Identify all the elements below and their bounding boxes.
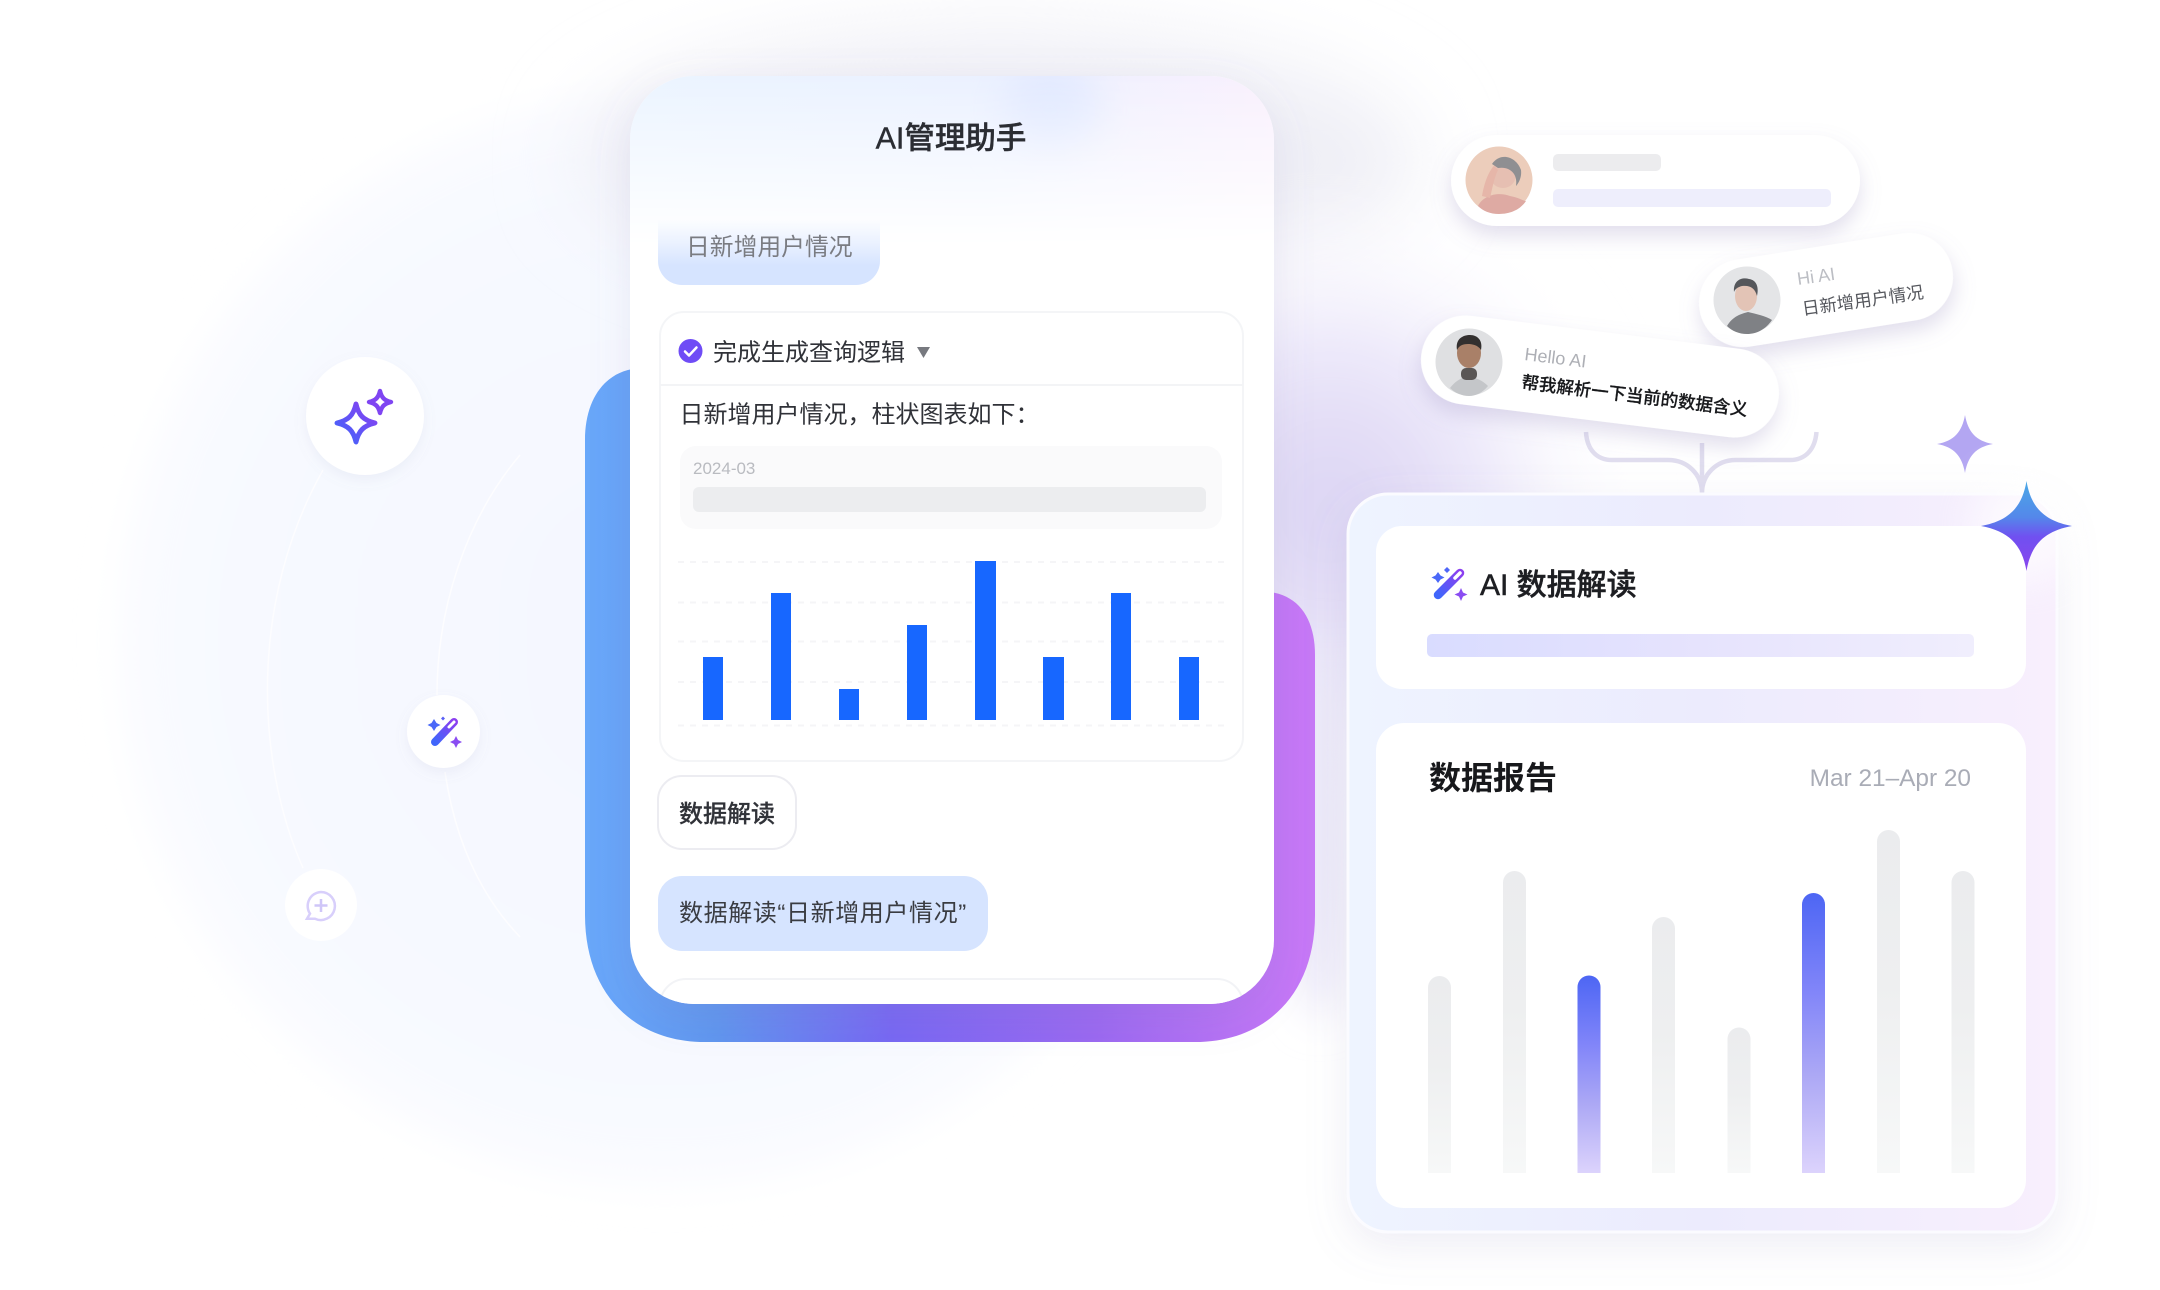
title: AI管理助手: [876, 122, 1026, 156]
icon: magic wand badge: [407, 695, 480, 768]
user query pill: [658, 220, 880, 285]
data interpretation chip: [658, 776, 796, 849]
chat bubble: Hi AI: Hi AI: [1796, 264, 1836, 289]
date selector: [680, 446, 1222, 529]
star: gradient: [1972, 471, 2082, 581]
dropdown arrow: [917, 347, 930, 358]
star: lilac: [1937, 415, 1993, 473]
chat bubble: Hi AI: [1693, 227, 1959, 353]
card: data report: [1376, 723, 2026, 1208]
bar chart: report: [1428, 830, 1974, 1173]
icon: magic wand: [1432, 567, 1468, 601]
gradient frame behind phone: [585, 368, 1315, 1042]
chat bubble: placeholder user: [1451, 135, 1860, 226]
user message bubble: [658, 876, 988, 951]
avatar: woman: [1466, 146, 1532, 214]
user message bubble: 数据解读“日新增用户情况”: [679, 900, 967, 927]
user query pill: 日新增用户情况: [686, 234, 853, 261]
card: AI data interpretation: [1376, 526, 2026, 689]
avatar: man with beard: [1436, 328, 1502, 396]
chart caption: 日新增用户情况，柱状图表如下：: [680, 402, 1040, 428]
bar chart: [703, 561, 1199, 720]
card heading: AI 数据解读: [1480, 569, 1637, 602]
chat bubble: Hi AI: 日新增用户情况: [1801, 282, 1925, 319]
placeholder bar: [1427, 634, 1974, 657]
connector lines: [1586, 432, 1816, 493]
status text: 完成生成查询逻辑: [713, 340, 905, 366]
date selector: 2024-03: [693, 459, 755, 478]
infographic scene: [282, 32, 2072, 1246]
background glow shapes: [120, 30, 1620, 1185]
chat bubble: Hello AI: Hello AI: [1524, 344, 1588, 372]
panel: AI report: [1348, 494, 2057, 1232]
chat bubble: Hello AI: 帮我解析一下当前的数据含义: [1521, 372, 1749, 420]
data interpretation chip: 数据解读: [679, 801, 775, 828]
chat bubble: Hello AI: [1416, 310, 1784, 443]
date range: Mar 21–Apr 20: [1810, 765, 1971, 792]
panel: query result card: [660, 312, 1243, 761]
icon: chat plus badge: [285, 869, 357, 941]
icon: sparkles badge: [306, 357, 424, 475]
report heading: 数据报告: [1429, 760, 1557, 796]
panel: phone AI assistant: [630, 65, 1274, 1059]
avatar: man in dark shirt: [1714, 266, 1780, 334]
icon: check: [678, 339, 702, 363]
